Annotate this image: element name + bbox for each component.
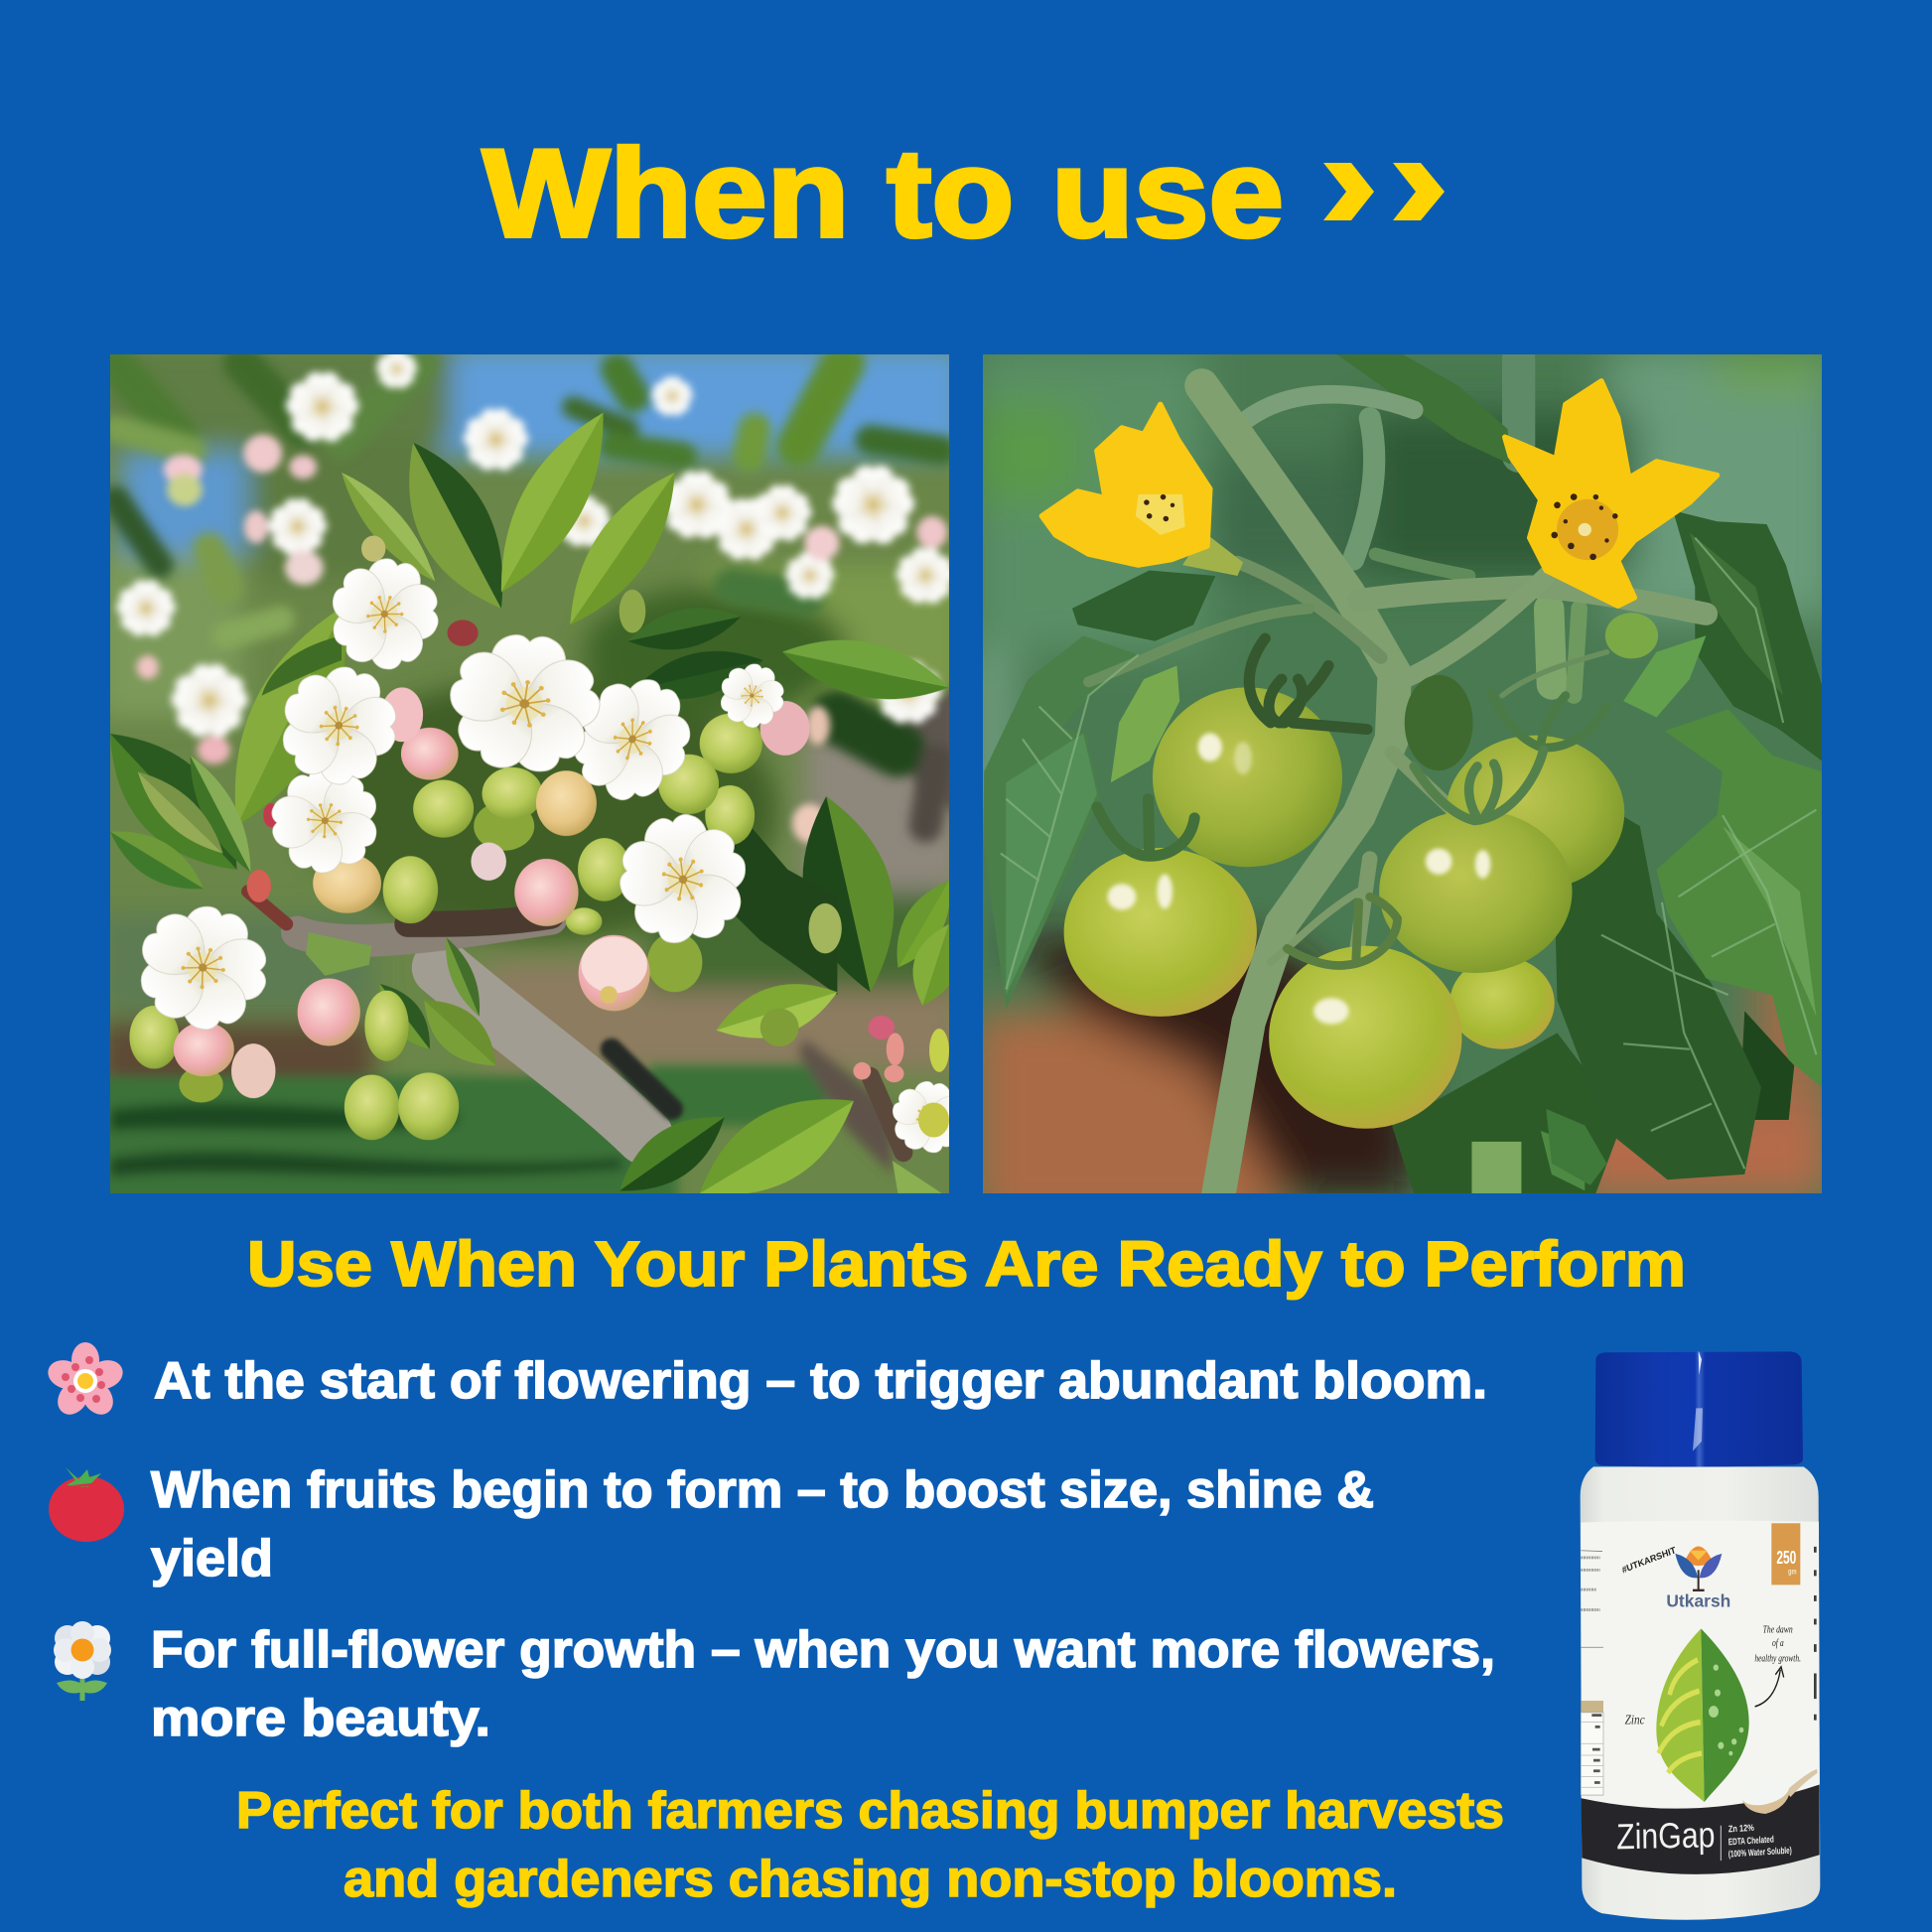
handwritten tagline: of a	[1772, 1637, 1784, 1649]
lower foliage	[1392, 1011, 1794, 1196]
blurred background blossoms	[114, 349, 957, 843]
text: full-flower tip	[151, 1621, 1495, 1747]
product specification: Zn 12%	[1728, 1822, 1754, 1835]
text: full-flower tip: more beauty.	[151, 1690, 490, 1747]
text: fruit formation tip: yield	[151, 1530, 273, 1587]
background stems	[1353, 358, 1580, 696]
text: flowering tip: At the start of flowering – to trigger abundant bloom.	[154, 1352, 1487, 1410]
text: fruit formation tip	[151, 1461, 1374, 1587]
product specification: EDTA Chelated	[1728, 1834, 1774, 1848]
icon: double chevron arrow	[1323, 163, 1445, 220]
tomato leaves	[984, 354, 1822, 1185]
text: closing statement: and gardeners chasing non-stop blooms.	[344, 1851, 1397, 1908]
handwritten tagline: The dawn	[1763, 1624, 1793, 1636]
icon: Utkarsh logo	[1675, 1546, 1722, 1590]
fruitlets	[129, 687, 949, 1140]
tree branches	[248, 892, 903, 1153]
title: When to use	[483, 123, 1284, 263]
volume badge: 250	[1776, 1548, 1796, 1568]
leaf caption: Zinc	[1625, 1712, 1645, 1727]
text: full-flower tip: For full-flower growth – when you want more flowers,	[151, 1621, 1495, 1679]
icon: white flower	[54, 1621, 111, 1701]
text: fruit formation tip: When fruits begin to form – to boost size, shine &	[151, 1461, 1374, 1519]
hashtag: #UTKARSHIT	[1620, 1544, 1678, 1576]
product bottle: ZinGap	[1581, 1350, 1821, 1920]
icon: half-and-half leaf	[1656, 1628, 1749, 1802]
side panel fine print	[1581, 1547, 1815, 1721]
volume badge	[1771, 1523, 1800, 1585]
green tomatoes	[1064, 613, 1658, 1129]
tomato calyxes	[1097, 638, 1606, 966]
label	[1581, 1521, 1820, 1809]
text: closing statement	[236, 1782, 1504, 1908]
product specification	[1728, 1822, 1792, 1860]
icon: cherry blossom	[45, 1342, 126, 1421]
white blossoms	[114, 546, 973, 1163]
volume badge: gm	[1788, 1567, 1797, 1577]
text: closing statement: Perfect for both farmers chasing bumper harvests	[236, 1782, 1504, 1840]
scoop of powder	[1740, 1769, 1818, 1814]
product name: ZinGap	[1616, 1816, 1716, 1858]
icon: tomato	[49, 1467, 124, 1542]
handwritten tagline	[1754, 1624, 1801, 1665]
buds	[247, 535, 904, 1082]
main stem and branches	[1089, 385, 1706, 1196]
leaf veins	[1001, 538, 1816, 1169]
product band	[1582, 1769, 1820, 1874]
bottle cap	[1595, 1351, 1803, 1467]
photo: apple blossoms and fruitlets	[110, 354, 949, 1193]
arrow	[1755, 1667, 1784, 1707]
leaves	[110, 413, 959, 1195]
brand name: Utkarsh	[1666, 1592, 1730, 1611]
product specification: (100% Water Soluble)	[1728, 1845, 1792, 1860]
yellow flowers	[1041, 381, 1718, 606]
nutrition table	[1581, 1701, 1603, 1795]
subheading: Use When Your Plants Are Ready to Perform	[247, 1228, 1686, 1300]
handwritten tagline: healthy growth.	[1754, 1653, 1801, 1665]
photo: tomato plant with yellow flowers and green fruit	[983, 354, 1822, 1193]
blurred background foliage	[116, 363, 942, 826]
bottle body	[1581, 1466, 1820, 1920]
